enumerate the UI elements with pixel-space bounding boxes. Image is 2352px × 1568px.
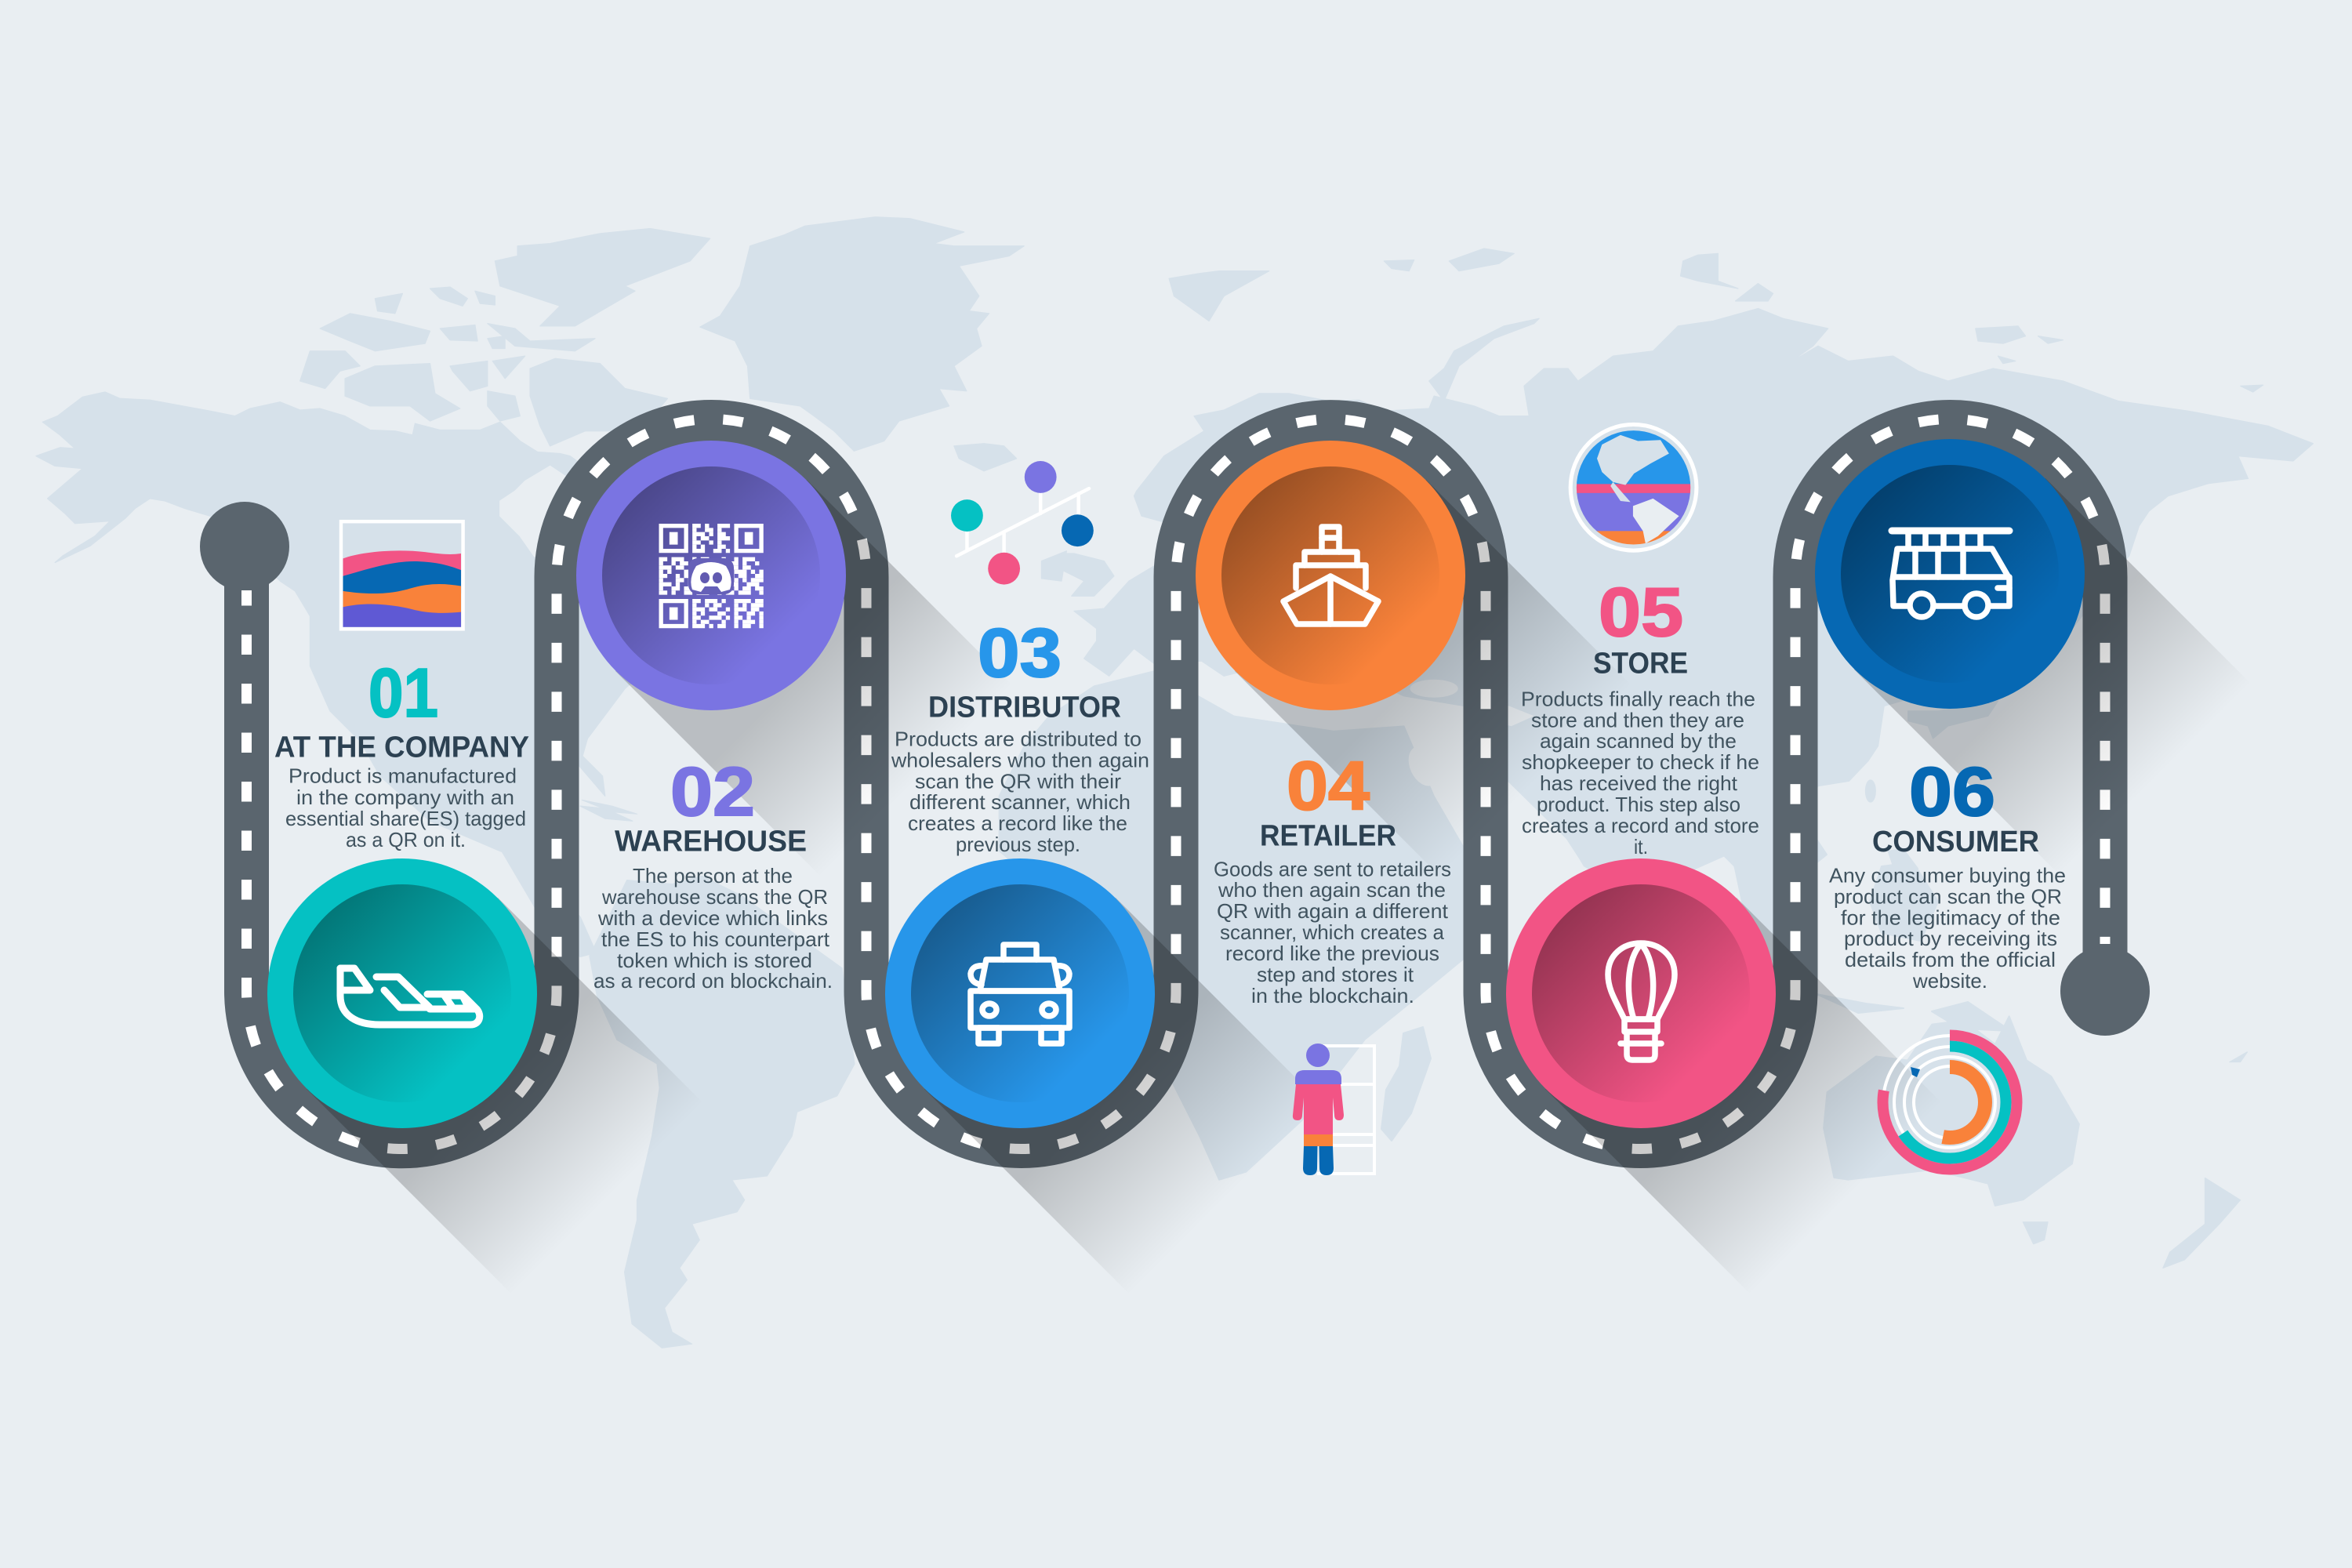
icon: radial chart <box>1883 1035 2016 1170</box>
body text: product by receiving its <box>1844 927 2057 950</box>
number 01: 01 <box>368 654 438 731</box>
body text: QR with again a different <box>1217 899 1449 923</box>
number 04: 04 <box>1287 746 1370 825</box>
body text: wholesalers who then again <box>891 748 1149 771</box>
body text <box>1521 687 1759 858</box>
body text: creates a record and store <box>1522 814 1759 837</box>
heading: RETAILER <box>1260 820 1396 853</box>
body text: creates a record like the <box>908 811 1127 835</box>
body text: the ES to his counterpart <box>601 927 830 951</box>
body text: Any consumer buying the <box>1829 864 2066 887</box>
world map <box>36 217 2313 1348</box>
icon: area chart frame <box>341 521 463 629</box>
number 06: 06 <box>1909 753 1995 830</box>
heading: STORE <box>1593 648 1688 681</box>
number 03: 03 <box>978 614 1062 691</box>
body text: website. <box>1912 969 1987 993</box>
body text: shopkeeper to check if he <box>1522 750 1759 774</box>
body text: scanner, which creates a <box>1220 920 1445 944</box>
icon: network nodes <box>951 461 1094 585</box>
heading: WAREHOUSE <box>615 825 807 858</box>
heading: CONSUMER <box>1872 826 2039 858</box>
body text: product. This step also <box>1537 793 1740 816</box>
body text <box>285 764 526 851</box>
long shadows <box>307 478 2281 1324</box>
body text: it. <box>1634 835 1648 858</box>
body text <box>1829 864 2066 993</box>
icon: bus <box>1892 531 2009 617</box>
body text: has received the right <box>1540 771 1738 795</box>
body text: product can scan the QR <box>1834 884 2062 908</box>
icon: discord badge <box>688 558 734 594</box>
body text <box>1214 858 1451 1007</box>
road <box>200 419 2150 1149</box>
icon: globe <box>1568 424 1698 550</box>
body text: again scanned by the <box>1540 729 1737 753</box>
body text: for the legitimacy of the <box>1841 906 2060 930</box>
body text: token which is stored <box>617 949 812 972</box>
body text: Product is manufactured <box>289 764 517 787</box>
body text: details from the official <box>1845 948 2056 971</box>
body text: with a device which links <box>597 906 828 930</box>
icon: QR code <box>659 526 764 626</box>
panel: step 4 text <box>1214 746 1451 1175</box>
body text: as a QR on it. <box>346 828 466 851</box>
circle: step 4 ship <box>1196 441 1465 710</box>
body text: who then again scan the <box>1218 878 1446 902</box>
body text: essential share(ES) tagged <box>285 807 526 830</box>
icon: taxi <box>971 945 1069 1044</box>
body text: different scanner, which <box>909 790 1131 814</box>
circle: step 1 plane <box>267 858 537 1128</box>
body text: record like the previous <box>1225 942 1439 965</box>
body text: in the company with an <box>296 786 514 809</box>
circle: step 2 QR <box>576 441 846 710</box>
body text: previous step. <box>956 833 1080 856</box>
number 05: 05 <box>1599 573 1683 651</box>
body text <box>593 864 833 993</box>
body text: Products finally reach the <box>1521 687 1755 710</box>
panel: step 1 text <box>274 521 529 851</box>
panel: step 5 text <box>1521 424 1759 858</box>
circle: step 5 balloon <box>1506 858 1776 1128</box>
heading: DISTRIBUTOR <box>928 691 1121 724</box>
icon: balloon <box>1608 943 1675 1060</box>
icon: plane <box>340 968 480 1025</box>
circle: step 3 taxi <box>885 858 1155 1128</box>
panel: step 6 text <box>1829 753 2066 1170</box>
body text: store and then they are <box>1531 709 1744 732</box>
number 02: 02 <box>670 753 755 830</box>
panel: step 3 text <box>891 461 1149 856</box>
body text: step and stores it <box>1257 963 1414 986</box>
body text: Goods are sent to retailers <box>1214 858 1451 881</box>
icon: ship <box>1283 527 1378 624</box>
body text: scan the QR with their <box>915 770 1121 793</box>
circle: step 6 bus <box>1815 439 2085 709</box>
body text: warehouse scans the QR <box>601 885 828 909</box>
body text <box>891 728 1149 856</box>
body text: as a record on blockchain. <box>593 969 833 993</box>
panel: step 2 text <box>593 753 833 993</box>
body text: The person at the <box>633 864 793 887</box>
heading: AT THE COMPANY <box>274 731 529 764</box>
icon: person with height chart <box>1293 1044 1374 1175</box>
body text: in the blockchain. <box>1251 984 1414 1007</box>
body text: Products are distributed to <box>895 728 1142 751</box>
